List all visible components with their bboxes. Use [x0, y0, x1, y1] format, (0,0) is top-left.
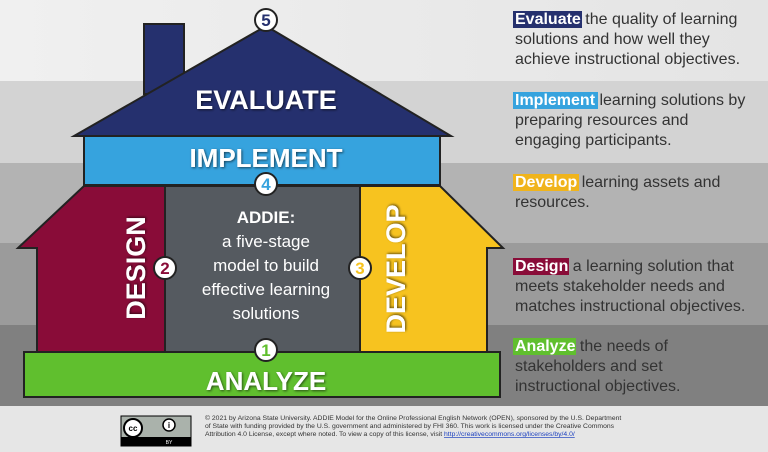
- descriptions: Evaluate the quality of learning: [515, 11, 737, 28]
- base: analyze: [24, 352, 500, 397]
- number circles: 1: [261, 341, 271, 360]
- descriptions: achieve instructional objectives.: [515, 51, 740, 68]
- center text: [202, 208, 330, 323]
- footer credit: Attribution 4.0 License, except where noted. To view a copy of this license, visit http://creativecommons.org/licenses/by/4.0/: [205, 431, 575, 438]
- roof: evaluate: [74, 26, 451, 136]
- descriptions: instructional objectives.: [515, 378, 680, 395]
- number circles: [154, 9, 371, 361]
- descriptions: solutions and how well they: [515, 31, 710, 48]
- descriptions: meets stakeholder needs and: [515, 278, 725, 295]
- cc badge: i: [168, 421, 170, 430]
- descriptions: resources.: [515, 194, 590, 211]
- footer credit: of State with funding provided by the U.S. government and administered by FHI 360. This work is licensed under the Creative Commons: [205, 423, 615, 430]
- number circles: 3: [355, 259, 365, 278]
- label: DEVELOP: DEVELOP: [381, 204, 411, 334]
- wing: develop: [360, 186, 503, 352]
- label: DESIGN: DESIGN: [121, 216, 151, 320]
- wing: design: [18, 186, 165, 352]
- descriptions: preparing resources and: [515, 112, 688, 129]
- descriptions: Develop learning assets and: [515, 174, 720, 191]
- chimney: [144, 24, 184, 94]
- center text: effective learning: [202, 280, 330, 299]
- descriptions: stakeholders and set: [515, 358, 663, 375]
- band: implement: [84, 136, 440, 185]
- descriptions: matches instructional objectives.: [515, 298, 745, 315]
- descriptions: engaging participants.: [515, 132, 672, 149]
- descriptions: [513, 11, 745, 395]
- footer credit: © 2021 by Arizona State University. ADDIE Model for the Online Professional English Network (OPEN), sponsored by the U.S. Department: [205, 414, 621, 422]
- number circles: 5: [261, 11, 271, 30]
- cc badge: BY: [166, 440, 173, 446]
- center text: a five-stage: [222, 232, 310, 251]
- cc badge: cc: [129, 424, 138, 433]
- descriptions: Analyze the needs of: [515, 338, 669, 355]
- house: [18, 24, 503, 397]
- center panel: [165, 186, 360, 352]
- descriptions: Design a learning solution that: [515, 258, 734, 275]
- center text: solutions: [232, 304, 300, 323]
- label: IMPLEMENT: IMPLEMENT: [189, 143, 343, 173]
- number circles: 4: [261, 175, 271, 194]
- descriptions: Implement learning solutions by: [515, 92, 745, 109]
- footer credit: [205, 414, 621, 438]
- cc badge: [121, 416, 191, 446]
- center text: model to build: [213, 256, 319, 275]
- label: ANALYZE: ANALYZE: [206, 366, 326, 396]
- center text: ADDIE:: [237, 208, 295, 227]
- number circles: 2: [160, 259, 170, 278]
- label: EVALUATE: EVALUATE: [195, 85, 337, 115]
